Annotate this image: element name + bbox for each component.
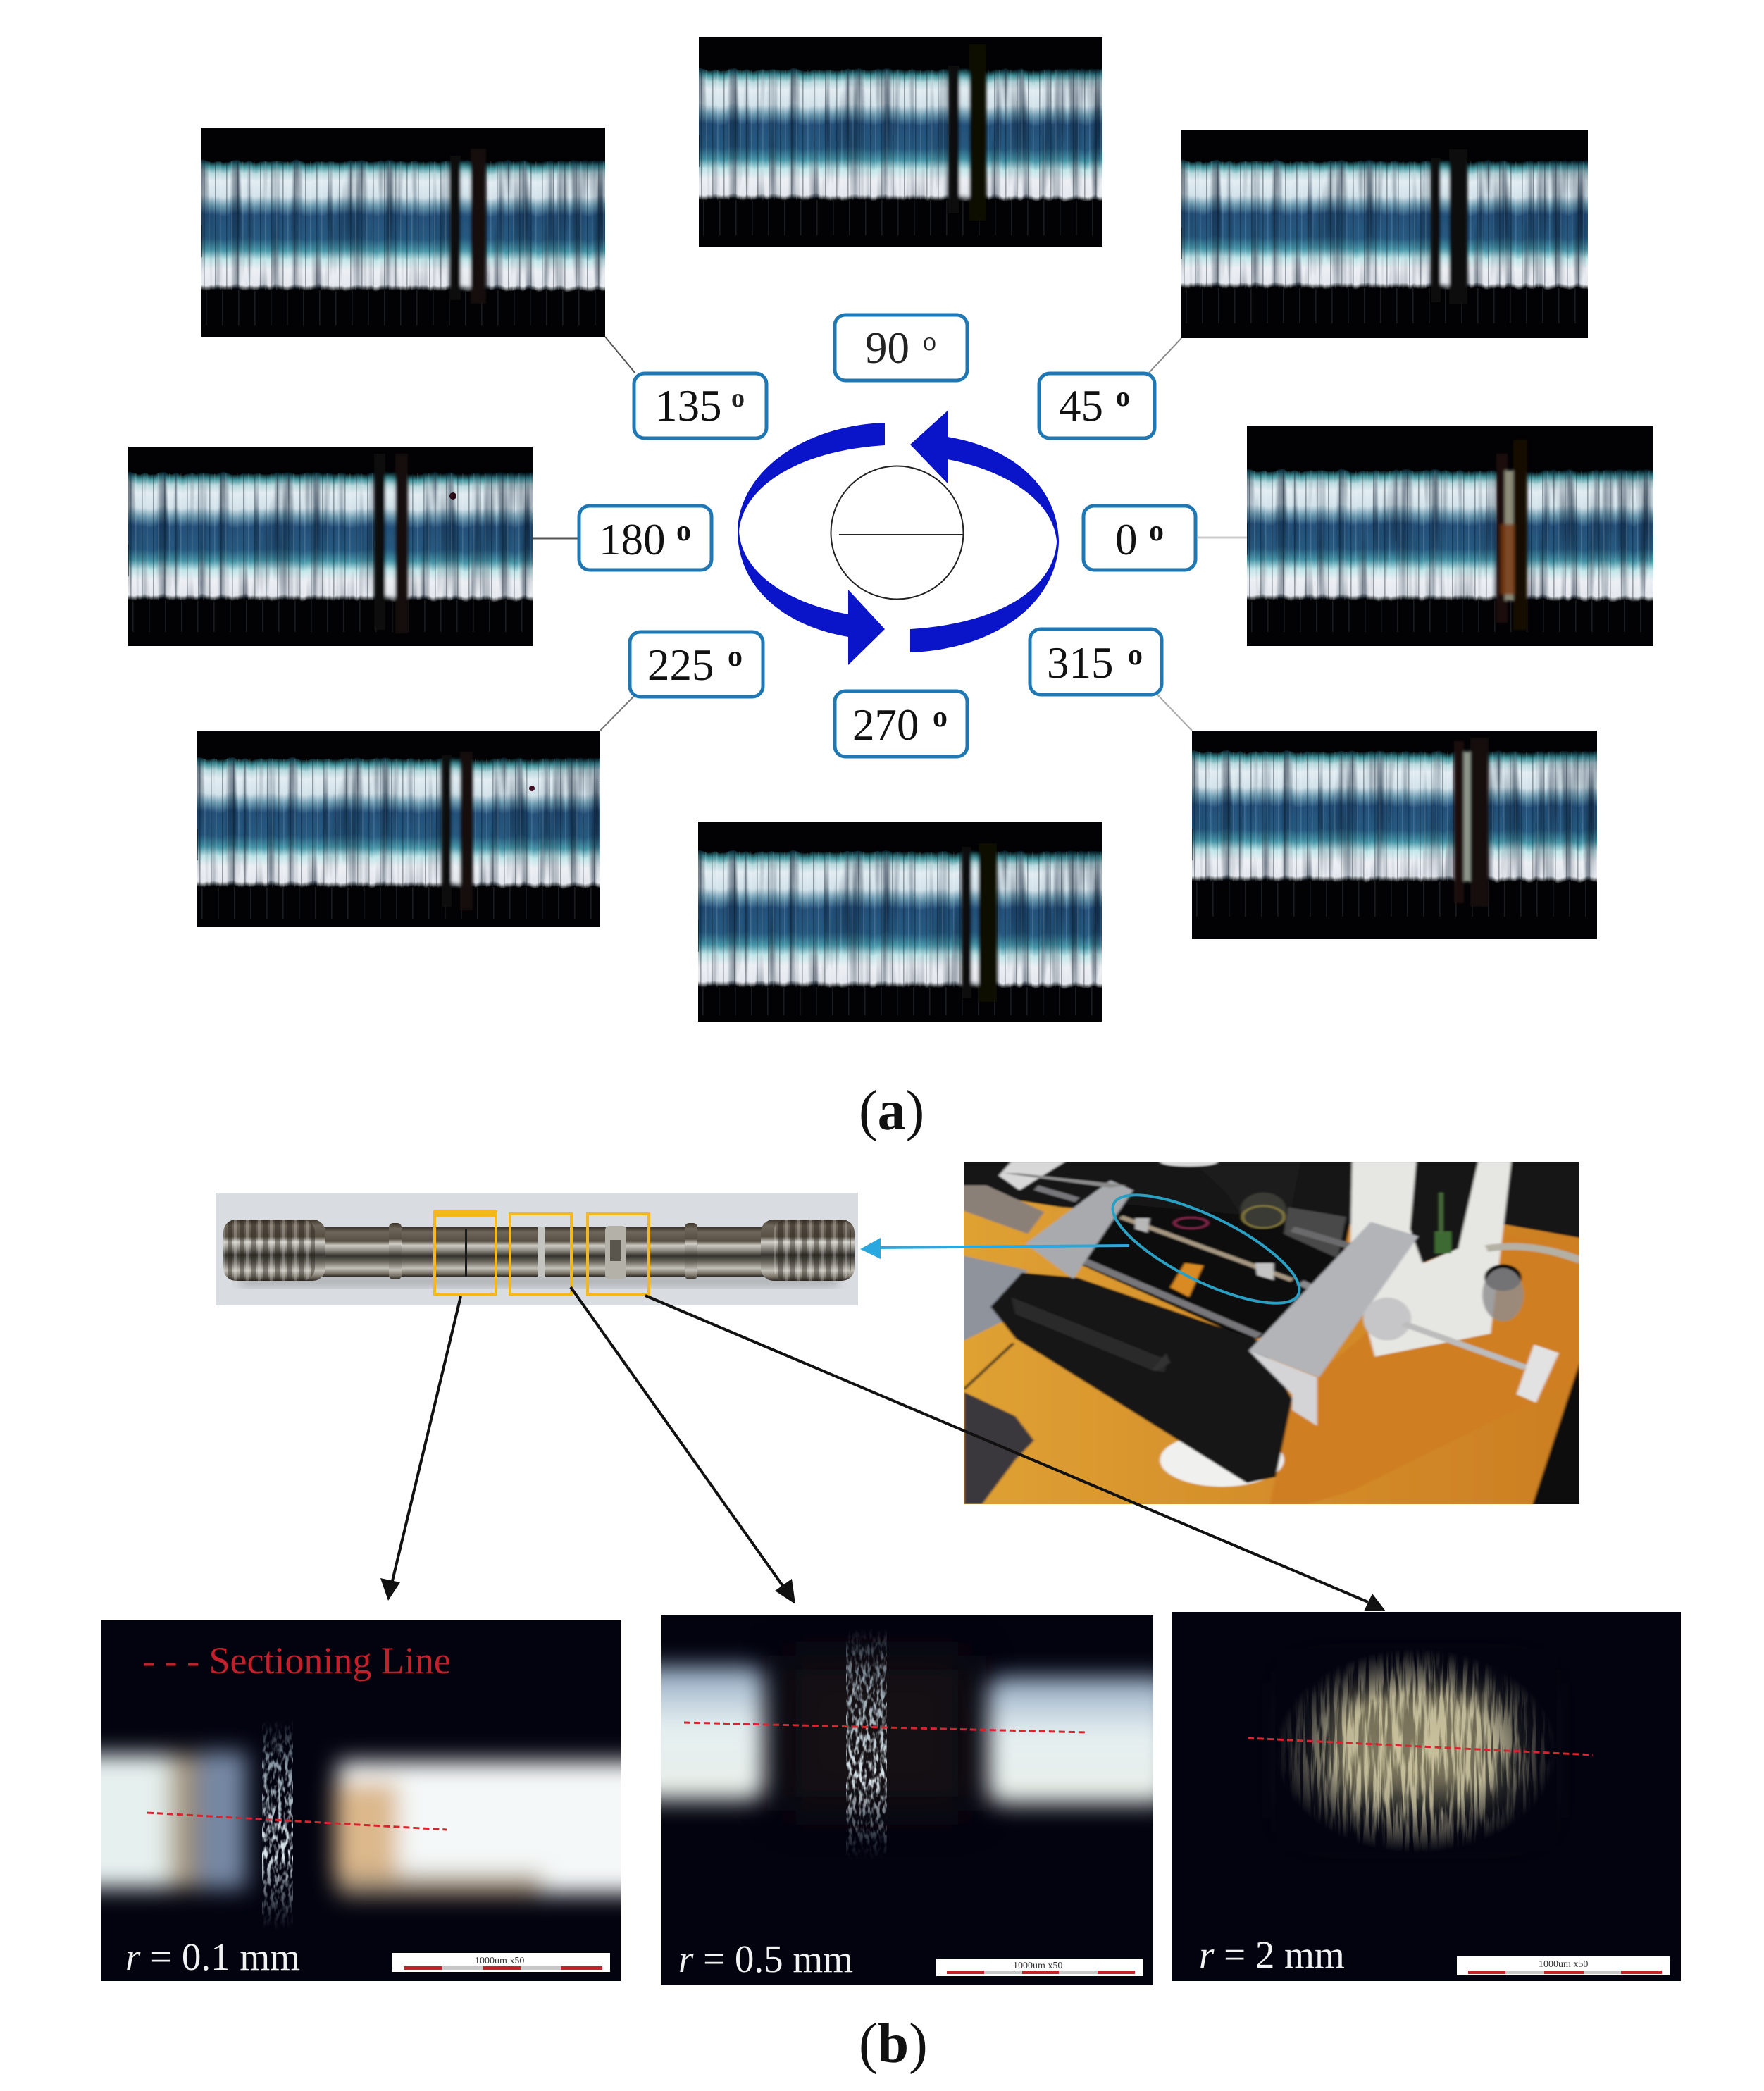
label: notch radius: r = 0.1 mm [125, 1935, 300, 1978]
caption: (a): (a) [859, 1080, 924, 1142]
label: 180 degrees: o [676, 515, 691, 547]
arrow: rotation direction right [910, 411, 1059, 652]
label: 315 degrees [1030, 629, 1162, 695]
label: 225 degrees: 225 [647, 640, 714, 690]
label: 0 degrees: 0 [1115, 515, 1137, 564]
label: 90 degrees [835, 315, 967, 380]
arrow: specimen to r = 2 mm [645, 1296, 1386, 1611]
arrow: specimen to r = 0.5 mm [571, 1287, 795, 1604]
label: 315 degrees: 315 [1047, 638, 1113, 688]
panel: angular inspection (a) [128, 37, 1653, 1022]
connector line: 180 degrees [533, 537, 578, 540]
label: 135 degrees: 135 [655, 381, 721, 430]
micrograph: 180 degrees [128, 447, 533, 646]
connector line: 315 degrees [1157, 694, 1192, 731]
specimen shadow [240, 1275, 838, 1286]
connector line: 0 degrees [1198, 537, 1247, 538]
scale bar: 1000um x50 [1013, 1961, 1062, 1971]
label: 315 degrees: o [1128, 639, 1143, 671]
scale bar [1457, 1956, 1670, 1975]
label: 270 degrees: 270 [852, 700, 919, 750]
arrow: specimen to r = 0.1 mm [380, 1296, 461, 1601]
sectioning line [1248, 1738, 1593, 1755]
label: 270 degrees: o [933, 701, 948, 733]
label: 135 degrees [634, 373, 766, 438]
label: notch radius: r = 0.5 mm [678, 1937, 853, 1980]
label: 225 degrees: o [728, 640, 743, 673]
micrograph: 135 degrees [201, 128, 605, 337]
micrograph: 315 degrees [1192, 731, 1597, 939]
highlight box: r = 2 mm notch [588, 1214, 649, 1294]
scale bar: 1000um x50 [1539, 1959, 1588, 1970]
label: 90 degrees: 90 [865, 323, 909, 373]
specimen body [223, 1220, 855, 1281]
micrograph: 0 degrees [1247, 426, 1653, 646]
label: 0 degrees [1083, 506, 1195, 570]
micrograph: r = 2 mm [1172, 1612, 1681, 1981]
label: 180 degrees [579, 506, 712, 570]
label: 270 degrees [835, 691, 967, 757]
connector line: 225 degrees [600, 696, 634, 731]
micrograph: 45 degrees [1181, 130, 1588, 338]
label: 180 degrees: 180 [599, 515, 665, 564]
label: 45 degrees: o [1116, 380, 1130, 412]
legend: sectioning line: - - - Sectioning Line [142, 1639, 451, 1682]
arrow: specimen location link [860, 1238, 1129, 1259]
micrograph: r = 0.5 mm [662, 1615, 1153, 1985]
scale bar [392, 1953, 610, 1972]
label: 225 degrees [630, 632, 763, 697]
micrograph: r = 0.1 mm [101, 1620, 621, 1981]
micrograph: 90 degrees [699, 37, 1102, 247]
label: 90 degrees: o [923, 327, 936, 356]
diagram: specimen cross-section circle [831, 466, 964, 599]
arrow: rotation direction left [738, 423, 885, 665]
label: 45 degrees: 45 [1059, 381, 1103, 430]
label: 0 degrees: o [1149, 515, 1164, 547]
highlight box: r = 0.1 mm notch [435, 1212, 496, 1294]
label: 45 degrees [1039, 373, 1155, 438]
micrograph: 270 degrees [698, 822, 1102, 1022]
highlight: specimen ring on microscope stage [1100, 1174, 1312, 1324]
micrograph: 225 degrees [197, 731, 600, 927]
scale bar [936, 1959, 1143, 1976]
panel: microscope setup photo [964, 1162, 1579, 1504]
caption: (b): (b) [859, 2013, 928, 2075]
highlight box: r = 0.5 mm notch [510, 1214, 571, 1294]
connector line: 45 degrees [1148, 338, 1181, 373]
sectioning line [684, 1723, 1087, 1732]
label: notch radius: r = 2 mm [1199, 1933, 1345, 1976]
sectioning line [147, 1813, 447, 1830]
panel: specimen photo [216, 1193, 858, 1305]
connector line: 135 degrees [605, 337, 635, 373]
scale bar: 1000um x50 [475, 1956, 524, 1966]
label: 135 degrees: o [731, 383, 745, 413]
